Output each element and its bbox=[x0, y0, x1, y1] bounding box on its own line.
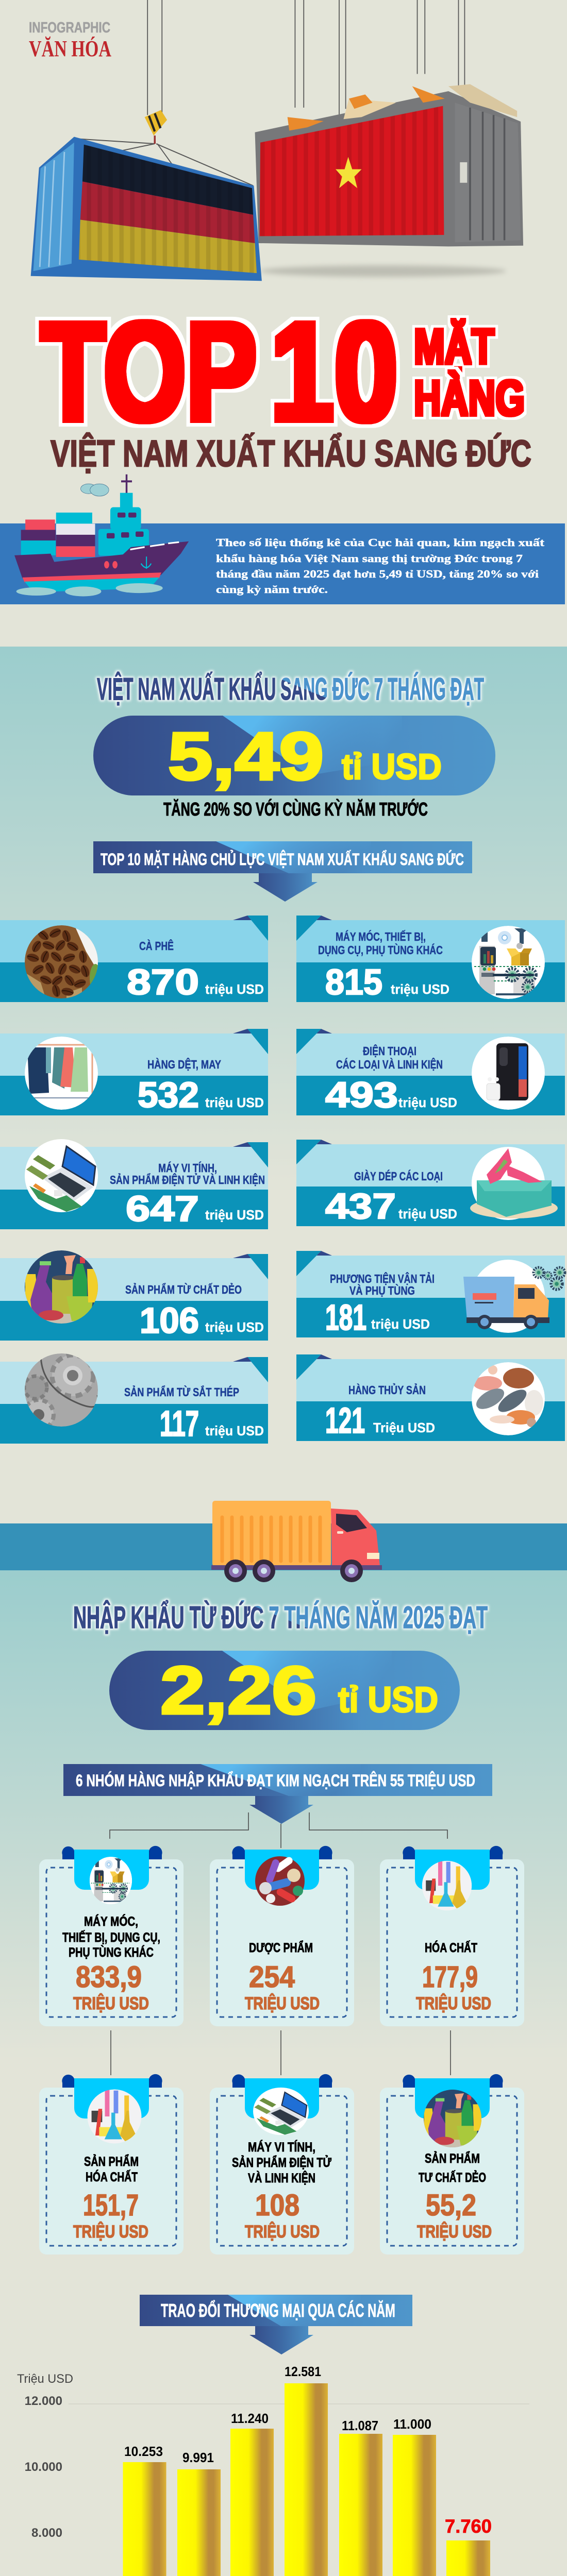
card: máy vi tính: MÁY VI TÍNH, bbox=[158, 1161, 217, 1175]
y axis unit: Triệu USD bbox=[17, 2372, 73, 2386]
banner: top 10 bbox=[93, 841, 472, 902]
card: máy móc (import) bbox=[39, 1846, 184, 2026]
export total pill: 5,49 bbox=[168, 718, 324, 794]
export total pill bbox=[93, 716, 495, 795]
card: chất dẻo bbox=[0, 1250, 268, 1341]
card: máy vi tính bbox=[0, 1139, 268, 1229]
banner: trade over years: TRAO ĐỔI THƯƠNG MẠI QUA CÁC NĂM bbox=[161, 2299, 395, 2321]
card: dược phẩm bbox=[210, 1846, 354, 2026]
divider band bbox=[0, 1523, 567, 1570]
bar values bbox=[124, 2364, 492, 2537]
card: dược phẩm: TRIỆU USD bbox=[245, 1994, 320, 2013]
title: MẶT: MẶT bbox=[414, 318, 494, 375]
card: hóa chất: TRIỆU USD bbox=[416, 1994, 491, 2013]
card: máy móc: DỤNG CỤ, PHỤ TÙNG KHÁC bbox=[318, 943, 443, 957]
logo: Infographic Văn Hóa bbox=[29, 20, 111, 61]
icon: flask bbox=[87, 2089, 142, 2144]
card: máy vi tính (import) bbox=[210, 2074, 354, 2255]
card: phương tiện vận tải bbox=[296, 1251, 565, 1337]
icon: machine bbox=[90, 1857, 132, 1904]
card: tư chất dẻo: TƯ CHẤT DẺO bbox=[419, 2170, 486, 2185]
import total pill: tỉ USD bbox=[338, 1680, 438, 1720]
card: dược phẩm: DƯỢC PHẨM bbox=[249, 1940, 313, 1955]
export total pill: tỉ USD bbox=[342, 747, 442, 787]
card: hóa chất: 177,9 bbox=[422, 1960, 478, 1994]
Vietnam container bbox=[255, 84, 523, 246]
intro text: cùng kỳ năm trước. bbox=[216, 583, 328, 596]
intro text: tháng đầu năm 2025 đạt hơn 5,49 tỉ USD, tăng 20% so với bbox=[216, 568, 539, 580]
title: TOP 10: 10 bbox=[270, 293, 398, 450]
card: máy vi tính (import): TRIỆU USD bbox=[245, 2222, 320, 2242]
y axis labels: 8.000 bbox=[31, 2526, 62, 2540]
card: sắt thép: triệu USD bbox=[205, 1423, 264, 1438]
icon: orange truck bbox=[211, 1501, 382, 1582]
hero illustration: containers bbox=[31, 0, 523, 281]
card: máy móc: 815 bbox=[325, 962, 382, 1002]
title: HÀNG: HÀNG bbox=[414, 370, 525, 426]
bar values: 11.000 bbox=[393, 2416, 431, 2432]
card: điện thoại: 493 bbox=[325, 1075, 398, 1115]
card: hàng dệt may: 532 bbox=[138, 1075, 199, 1115]
connectors bbox=[110, 1812, 451, 2075]
panel: import background bbox=[0, 1570, 567, 2060]
card: tư chất dẻo: SẢN PHẨM bbox=[425, 2150, 480, 2166]
y axis labels: 10.000 bbox=[25, 2460, 62, 2474]
card: sắt thép: 117 bbox=[160, 1403, 199, 1444]
cranes ropes bbox=[78, 0, 464, 185]
card: máy móc (import): TRIỆU USD bbox=[73, 1994, 149, 2013]
logo: Infographic Văn Hóa: INFOGRAPHIC bbox=[29, 20, 110, 36]
card: sản phẩm hóa chất: SẢN PHẨM bbox=[84, 2154, 139, 2169]
icon: machine bbox=[472, 926, 545, 999]
logo: Infographic Văn Hóa: VĂN HÓA bbox=[29, 36, 111, 61]
banner: 6 groups bbox=[63, 1764, 492, 1824]
card: tư chất dẻo: TRIỆU USD bbox=[417, 2222, 492, 2242]
import total pill bbox=[109, 1651, 460, 1730]
card: máy móc: MÁY MÓC, THIẾT BỊ, bbox=[336, 929, 426, 943]
card: máy móc (import): MÁY MÓC, bbox=[84, 1913, 138, 1929]
card: điện thoại: triệu USD bbox=[398, 1095, 457, 1110]
bar values: 12.581 bbox=[285, 2364, 321, 2379]
card: máy vi tính (import): SẢN PHẨM ĐIỆN TỬ bbox=[232, 2155, 331, 2170]
card: thủy sản: Triệu USD bbox=[373, 1420, 435, 1435]
card: hàng dệt may: triệu USD bbox=[205, 1095, 264, 1110]
card: chất dẻo: SẢN PHẨM TỪ CHẤT DẺO bbox=[125, 1282, 242, 1296]
card: sản phẩm hóa chất bbox=[39, 2074, 184, 2255]
card: chất dẻo: 106 bbox=[140, 1300, 199, 1341]
icon: truck bbox=[463, 1260, 565, 1333]
card: cà phê: triệu USD bbox=[205, 981, 264, 997]
icon: seafood bbox=[472, 1362, 545, 1435]
y axis labels bbox=[25, 2394, 62, 2576]
card: hóa chất bbox=[380, 1846, 524, 2026]
card: máy móc bbox=[296, 916, 565, 1002]
card: sản phẩm hóa chất: HÓA CHẤT bbox=[86, 2169, 138, 2184]
card: máy vi tính: SẢN PHẨM ĐIỆN TỬ VÀ LINH KIỆN bbox=[110, 1172, 265, 1187]
card: hóa chất: HÓA CHẤT bbox=[425, 1940, 477, 1955]
card: máy vi tính (import): VÀ LINH KIỆN bbox=[248, 2170, 315, 2185]
bar values: 9.991 bbox=[182, 2450, 214, 2465]
icon: ship bbox=[14, 474, 189, 597]
card: điện thoại: ĐIỆN THOẠI bbox=[363, 1044, 416, 1058]
card: giày dép bbox=[296, 1140, 565, 1226]
card: giày dép: triệu USD bbox=[398, 1206, 457, 1222]
card: sắt thép: SẢN PHẨM TỪ SẮT THÉP bbox=[124, 1384, 239, 1399]
card: sản phẩm hóa chất: 151,7 bbox=[83, 2189, 139, 2222]
card: cà phê: CÀ PHÊ bbox=[139, 939, 174, 953]
icon: phone bbox=[472, 1037, 545, 1110]
y axis labels: 12.000 bbox=[25, 2394, 62, 2408]
card: thủy sản bbox=[296, 1354, 565, 1441]
icon: pills bbox=[255, 1856, 305, 1906]
crane hook bbox=[145, 110, 167, 144]
card: máy vi tính (import): MÁY VI TÍNH, bbox=[248, 2140, 315, 2155]
icon: plastics bbox=[424, 2090, 481, 2147]
bar values: 11.087 bbox=[342, 2418, 378, 2433]
icon: plastics bbox=[25, 1250, 98, 1324]
card: hàng dệt may: HÀNG DỆT, MAY bbox=[147, 1057, 221, 1071]
card: chất dẻo: triệu USD bbox=[205, 1319, 264, 1335]
card: tư chất dẻo: 55,2 bbox=[426, 2189, 476, 2222]
card: điện thoại bbox=[296, 1029, 565, 1115]
card: điện thoại: CÁC LOẠI VÀ LINH KIỆN bbox=[336, 1057, 443, 1071]
card: phương tiện vận tải: 181 bbox=[325, 1297, 366, 1337]
card: máy móc (import): THIẾT BỊ, DỤNG CỤ, bbox=[62, 1930, 160, 1945]
title: TOP 10: TOP bbox=[41, 293, 257, 450]
intro text: Theo số liệu thống kê của Cục hải quan, kim ngạch xuất bbox=[216, 536, 544, 549]
import total pill: 2,26 bbox=[160, 1652, 316, 1728]
intro band bbox=[0, 523, 565, 604]
card: giày dép: 437 bbox=[325, 1186, 396, 1226]
card: sắt thép bbox=[0, 1353, 268, 1444]
bar values: 7.760 bbox=[445, 2516, 492, 2537]
card: cà phê: 870 bbox=[127, 962, 199, 1002]
banner: trade over years bbox=[140, 2295, 412, 2354]
Germany container bbox=[31, 137, 262, 281]
icon: shoes bbox=[470, 1147, 558, 1220]
card: tư chất dẻo bbox=[380, 2074, 524, 2255]
card: phương tiện vận tải: triệu USD bbox=[371, 1316, 430, 1332]
card: phương tiện vận tải: PHƯƠNG TIỆN VẬN TẢI bbox=[330, 1271, 435, 1285]
card: máy vi tính: 647 bbox=[126, 1189, 199, 1229]
icon: laptop bbox=[253, 2088, 309, 2135]
card: máy móc (import): 833,9 bbox=[76, 1960, 142, 1994]
card: giày dép: GIÀY DÉP CÁC LOẠI bbox=[354, 1169, 443, 1183]
icon: gears bbox=[24, 1353, 98, 1430]
card: sản phẩm hóa chất: TRIỆU USD bbox=[73, 2222, 148, 2242]
bars bbox=[123, 2383, 490, 2576]
intro text bbox=[216, 536, 544, 596]
card: máy vi tính (import): 108 bbox=[255, 2189, 299, 2222]
card: thủy sản: HÀNG THỦY SẢN bbox=[348, 1382, 426, 1397]
bar values: 11.240 bbox=[231, 2411, 269, 2426]
card: máy móc (import): PHỤ TÙNG KHÁC bbox=[69, 1944, 154, 1960]
icon: laptop bbox=[25, 1139, 98, 1212]
icon: coffee bbox=[24, 925, 101, 999]
icon: clothes bbox=[25, 1037, 98, 1110]
card: thủy sản: 121 bbox=[325, 1400, 365, 1440]
panel: export background bbox=[0, 647, 567, 1193]
bar chart bbox=[17, 2364, 529, 2576]
growth note: TĂNG 20% SO VỚI CÙNG KỲ NĂM TRƯỚC bbox=[163, 798, 428, 820]
icon: flask bbox=[422, 1861, 472, 1910]
card: cà phê bbox=[0, 916, 268, 1002]
card: máy vi tính: triệu USD bbox=[205, 1207, 264, 1223]
card: dược phẩm: 254 bbox=[249, 1960, 295, 1994]
card: hàng dệt may bbox=[0, 1029, 268, 1115]
card: máy móc: triệu USD bbox=[391, 981, 449, 997]
card: phương tiện vận tải: VÀ PHỤ TÙNG bbox=[349, 1283, 415, 1297]
intro text: khẩu hàng hóa Việt Nam sang thị trường Đức trong 7 bbox=[216, 552, 523, 565]
bar values: 10.253 bbox=[124, 2444, 163, 2459]
